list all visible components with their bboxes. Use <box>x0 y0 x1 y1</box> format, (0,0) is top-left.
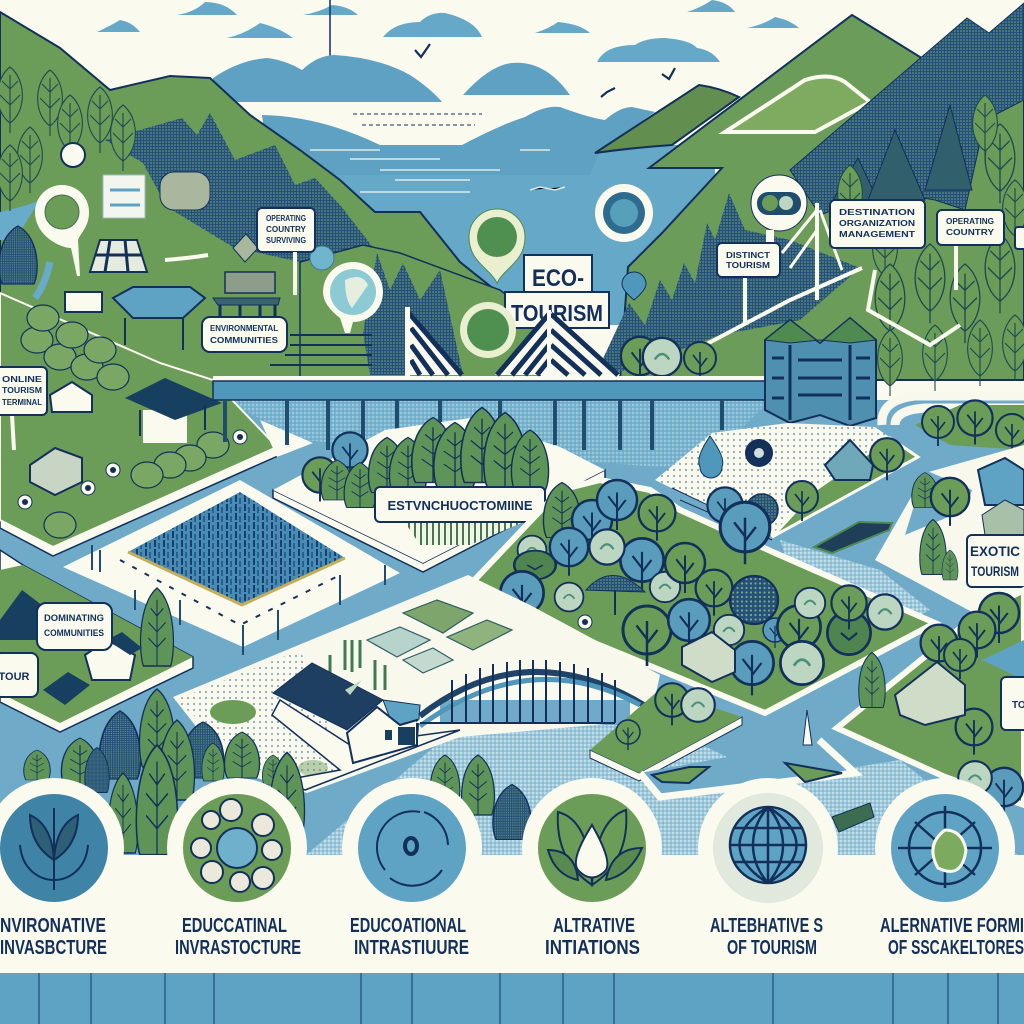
center foreground hill <box>300 245 540 385</box>
icon: leaves and drop <box>538 794 646 902</box>
map callouts: SURVIVING <box>266 236 306 245</box>
right navy mountain <box>790 3 1024 215</box>
birds <box>415 44 675 97</box>
lake far shores <box>262 107 655 175</box>
title sign: ECO- <box>532 265 584 292</box>
cream path around park <box>640 740 855 797</box>
bottom-left parcel houses and callouts: COMMUNITIES <box>44 628 104 638</box>
left small lake <box>0 200 40 240</box>
distant blue hills <box>213 55 570 102</box>
central parcel trees <box>302 408 549 508</box>
right green mountain large <box>620 15 1024 380</box>
icon: leaf shield <box>0 794 108 902</box>
stippled garden ground <box>175 650 340 780</box>
foreground trees by bridge <box>621 337 716 385</box>
clouds <box>97 0 799 62</box>
right green mountain small <box>595 85 739 153</box>
central parcel label <box>375 487 545 522</box>
barn <box>272 663 460 790</box>
labels: EDUCCATINAL <box>182 915 287 937</box>
upper-left parcel orchard <box>21 305 229 538</box>
map callouts: COMMUNITIES <box>210 336 279 345</box>
map callouts: ORGANIZATION <box>839 219 915 228</box>
left stippled forest slope <box>105 113 375 262</box>
map callouts: ENVIRONMENTAL <box>210 324 278 333</box>
bottom-left parcel <box>0 550 193 732</box>
bottom-left parcel houses and callouts: DOMINATING <box>44 613 104 623</box>
bridge deck <box>213 376 773 450</box>
icon: globe <box>713 793 823 903</box>
right stippled pines <box>600 193 860 372</box>
map callouts: TERMINAL <box>2 398 42 407</box>
map callouts: DISTINCT <box>726 251 770 260</box>
mountain chevron pines <box>830 105 972 205</box>
icon: cycle <box>358 794 466 902</box>
right ground trees <box>838 95 1024 396</box>
icon: compass target <box>891 794 999 902</box>
east parcel structures: EXOTIC <box>970 543 1020 559</box>
land water base <box>0 400 1024 870</box>
central building <box>765 318 876 426</box>
labels: EDUCOATIONAL <box>350 915 466 937</box>
lower garden parcel <box>173 575 660 793</box>
east parcel <box>875 445 1024 640</box>
map callouts: TOURISM <box>726 261 770 270</box>
labels: INVRASTOCTURE <box>175 937 301 959</box>
central forest parcel <box>273 418 605 572</box>
crop field edge and fence <box>92 545 385 655</box>
shelter and cabins <box>18 378 247 509</box>
labels: INTRASTIUURE <box>354 937 469 959</box>
east road <box>882 396 1024 425</box>
map callouts: ONLINE <box>2 375 43 384</box>
map callouts: MANAGEMENT <box>839 230 915 239</box>
flagpole <box>329 0 331 102</box>
labels: ALTRATIVE <box>553 915 635 937</box>
left green mountain far <box>0 12 520 385</box>
blue crop field <box>128 492 345 605</box>
winding cream path <box>705 268 960 345</box>
east lower parcel contents <box>859 593 1024 816</box>
map callouts: COUNTRY <box>266 225 307 234</box>
lake ripples <box>310 114 565 192</box>
lower-left forest <box>24 689 531 855</box>
left outline trees <box>0 67 135 284</box>
dotted plaza <box>655 423 918 537</box>
map pins <box>35 143 807 358</box>
center pines <box>363 253 463 375</box>
big park parcel <box>465 480 935 713</box>
mountain highlight patch <box>725 76 870 132</box>
labels: NVIRONATIVE <box>0 915 106 937</box>
left cable pylon <box>405 307 463 377</box>
central parcel label: ESTVNCHUOCTOMIINE <box>388 498 533 513</box>
dotted water <box>225 400 1024 860</box>
barge <box>814 522 892 553</box>
map callouts: OPERATING <box>266 214 306 223</box>
boats <box>652 710 874 832</box>
vegetable plots <box>330 600 512 690</box>
bottom cream band <box>0 778 1024 973</box>
arch-side parcel <box>590 690 742 781</box>
hillside features <box>65 175 372 365</box>
upper-left parcel <box>0 293 313 556</box>
winding stream <box>35 262 50 298</box>
icon: network ring <box>183 794 291 902</box>
labels: OF TOURISM <box>727 937 817 959</box>
east green patch <box>915 405 1024 450</box>
labels: INVASBCTURE <box>0 937 107 959</box>
east lower parcel <box>837 590 1024 805</box>
map callouts: COUNTRY <box>946 228 995 237</box>
labels <box>0 915 1024 959</box>
right cable pylon <box>495 310 620 380</box>
map callouts: TOURISM <box>2 386 42 395</box>
arch bridge <box>415 660 655 726</box>
plaza green strip <box>772 438 918 537</box>
bottom-left parcel houses and callouts <box>0 588 173 705</box>
park trees and ponds <box>500 480 903 695</box>
bottom blue strip <box>0 973 1024 1024</box>
map callouts: DESTINATION <box>839 208 915 217</box>
east road trees <box>922 400 1024 454</box>
lawn patches <box>210 700 328 776</box>
labels: ALTEBHATIVE S <box>710 915 823 937</box>
arch-side parcel trees <box>616 683 715 750</box>
east parcel structures <box>912 458 1024 587</box>
title sign <box>505 255 609 328</box>
map callouts <box>0 200 1024 450</box>
title sign: TOURISM <box>511 300 603 326</box>
map callouts: OPERATING <box>946 217 994 226</box>
crop field parcel <box>63 480 400 647</box>
lake <box>255 145 715 325</box>
labels: INTIATIONS <box>545 937 640 959</box>
plaza icons <box>699 436 904 531</box>
plaza strip lines <box>672 488 772 540</box>
